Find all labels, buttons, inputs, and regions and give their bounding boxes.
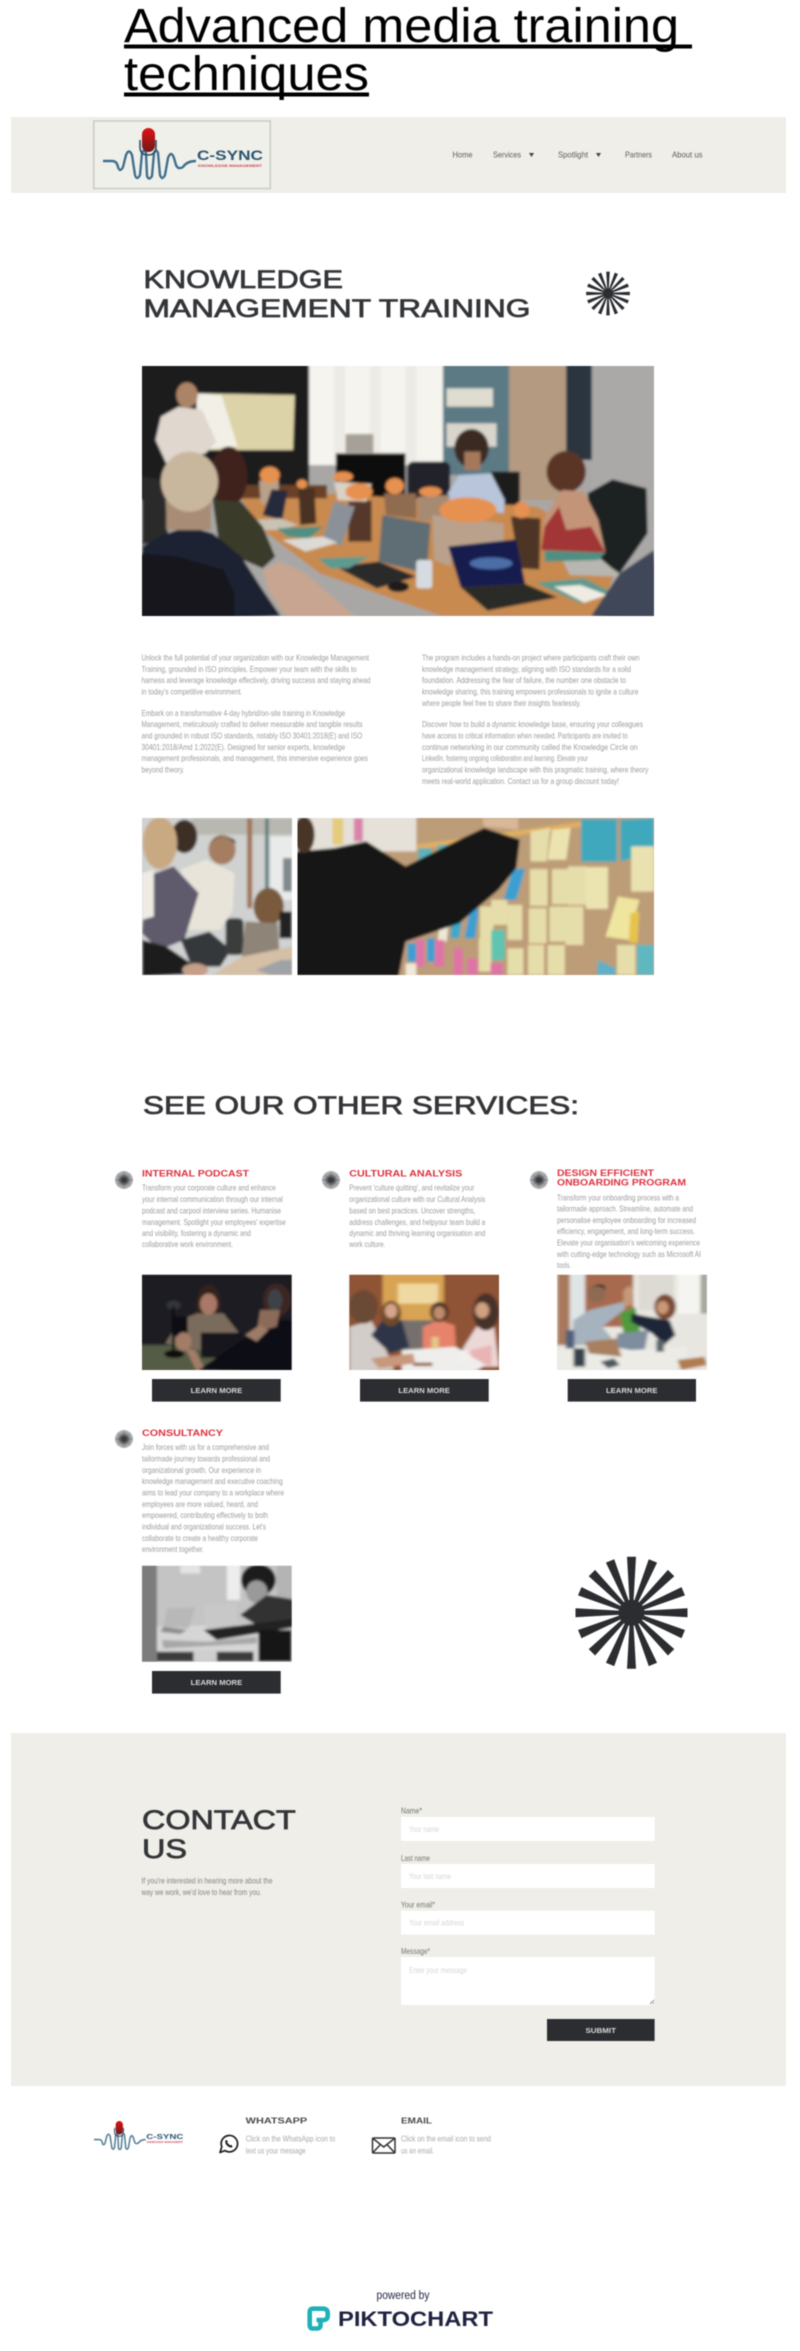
button: submit: SUBMIT	[586, 2026, 616, 2035]
navigation menu: Partners	[625, 150, 652, 160]
panel: body text left column: and grounded in robust ISO standards, notably ISO 30401:2018(E) and ISO	[142, 730, 363, 740]
button: learn more	[360, 1379, 489, 1402]
panel: body text left column: harness and leverage knowledge effectively, driving success and staying ahead	[142, 675, 371, 685]
email title: EMAIL	[401, 2116, 432, 2126]
panel: body text right column: foundation. Addressing the fear of failure, the number one obstacle to	[422, 675, 626, 685]
powered by piktochart: PIKTOCHART	[338, 2308, 493, 2331]
form: message field	[401, 1946, 655, 2005]
panel: whatsapp contact	[220, 2116, 336, 2156]
service title: INTERNAL PODCAST	[142, 1168, 249, 1179]
service description: organizational culture with our Cultural Analysis	[349, 1194, 485, 1204]
service description: collaborative work environment.	[142, 1239, 233, 1249]
service description: aims to lead your company to a workplace where	[142, 1488, 284, 1498]
button: learn more: LEARN MORE	[398, 1386, 450, 1395]
navigation menu: Spotlight	[558, 150, 589, 160]
service title: DESIGN EFFICIENT	[557, 1167, 654, 1178]
button: submit	[547, 2019, 655, 2041]
panel: internal podcast	[115, 1168, 300, 1402]
panel: body text right column: meets real-world application. Contact us for a group discount today!	[422, 776, 619, 786]
form: last name field: Last name	[401, 1853, 430, 1863]
panel: body text right column: where people feel free to share their insights fearlessly.	[421, 698, 581, 708]
logo: C-SYNC footer: C-SYNC	[146, 2132, 184, 2141]
powered by piktochart: powered by	[376, 2290, 430, 2302]
panel: body text left column: in today's competitive environment.	[142, 686, 242, 696]
navigation menu: About us	[672, 150, 702, 160]
panel: body text left column: Embark on a transformative 4-day hybrid/on-site training in Knowledge	[142, 708, 345, 718]
panel: body text left column: Management, meticulously crafted to deliver measurable and tangible results	[142, 719, 362, 729]
logo: C-SYNC footer	[93, 2120, 184, 2151]
logo: C-SYNC header: C-SYNC	[197, 148, 263, 163]
form: email field: Your email address	[409, 1918, 464, 1928]
icon: envelope	[372, 2138, 395, 2153]
service title: CONSULTANCY	[142, 1427, 224, 1438]
photo: monochrome laptops	[141, 1565, 292, 1662]
service description: knowledge management and executive coaching	[142, 1476, 283, 1486]
logo: C-SYNC footer: KNOWLEDGE MANAGEMENT	[147, 2141, 184, 2144]
service description: podcast and carpool interview series. Humanise	[142, 1206, 281, 1216]
service description	[349, 1182, 486, 1249]
form: email field: Your email*	[401, 1900, 436, 1910]
form: name field: Name*	[401, 1806, 423, 1816]
icon: starburst	[530, 1171, 548, 1189]
panel: consultancy	[115, 1427, 300, 1694]
panel: body text right column: The program includes a hands-on project where participants craft their own	[422, 652, 640, 662]
service description: environment together.	[142, 1544, 204, 1554]
button: learn more	[152, 1379, 281, 1402]
whatsapp text: Click on the WhatsApp icon to	[246, 2134, 336, 2144]
button: learn more: LEARN MORE	[191, 1678, 242, 1687]
service description: management. Spotlight your employees' expertise	[142, 1217, 286, 1227]
panel: body text right column: have access to critical information when needed. Participants are invited to	[422, 730, 628, 740]
panel: body text left column: beyond theory.	[142, 764, 184, 774]
service description: Join forces with us for a comprehensive and	[142, 1442, 269, 1452]
photo: team around a table	[141, 817, 293, 976]
panel: cultural analysis	[322, 1168, 509, 1402]
heading: contact us	[142, 1805, 296, 1864]
panel: body text left column	[142, 652, 371, 774]
service title: ONBOARDING PROGRAM	[557, 1177, 686, 1188]
contact intro text: If you're interested in hearing more about the	[142, 1876, 273, 1886]
powered by piktochart	[310, 2290, 493, 2331]
email text: us an email.	[401, 2146, 434, 2156]
form: name field: Your name	[409, 1824, 439, 1834]
service description: Prevent 'culture quitting', and revitalize your	[349, 1182, 474, 1192]
panel: design efficient onboarding program	[530, 1167, 716, 1402]
photo: sticky notes wall	[296, 817, 655, 976]
title: Advanced media training	[124, 0, 679, 53]
service description: tailormade approach. Streamline, automate and	[557, 1204, 693, 1214]
photo: colleagues high five	[556, 1274, 708, 1370]
title: techniques	[124, 48, 369, 101]
photo: meeting room training	[141, 365, 655, 617]
photo: podcast recording	[141, 1274, 292, 1371]
contact intro text	[141, 1876, 273, 1897]
service description: Transform your onboarding process with a	[557, 1192, 679, 1202]
panel: body text right column: continue networking in our community called the Knowledge Circle on	[422, 742, 638, 752]
service description: employees are more valued, heard, and	[142, 1499, 258, 1509]
panel: body text left column: Unlock the full potential of your organization with our Knowledge Management	[142, 652, 370, 662]
navigation menu: Services	[493, 150, 521, 160]
form: last name field	[401, 1853, 655, 1888]
service description: dynamic and thriving learning organisation and	[349, 1228, 486, 1238]
service title	[557, 1167, 686, 1188]
panel: body text left column: management professionals, and management, this immersive experience goes	[142, 753, 368, 763]
service description	[142, 1442, 284, 1554]
service description: personalise employee onboarding for increased	[557, 1215, 696, 1225]
heading: see our other services: SEE OUR OTHER SERVICES:	[143, 1092, 579, 1120]
form: message field: Enter your message	[409, 1965, 467, 1975]
service description: work culture.	[349, 1239, 385, 1249]
heading: contact us: CONTACT	[142, 1805, 296, 1835]
heading: knowledge management training	[144, 266, 530, 323]
icon: large starburst	[576, 1557, 688, 1669]
icon: starburst	[322, 1171, 340, 1189]
button: learn more	[568, 1379, 696, 1402]
navigation menu	[452, 150, 702, 160]
heading: knowledge management training: KNOWLEDGE	[144, 266, 343, 294]
service description	[556, 1192, 701, 1270]
logo: C-SYNC header	[94, 121, 270, 188]
email text	[401, 2134, 491, 2156]
navigation menu: Home	[452, 150, 473, 160]
service description: with cutting-edge technology such as Microsoft AI	[556, 1249, 701, 1259]
whatsapp text: text us your message	[246, 2146, 306, 2156]
panel: navigation header	[11, 117, 786, 193]
service description: individual and organizational success. Let's	[142, 1522, 266, 1532]
service description: based on best practices. Uncover strengths,	[349, 1206, 475, 1216]
photo: women talking in cafe	[348, 1274, 500, 1371]
heading: knowledge management training: MANAGEMENT TRAINING	[144, 295, 530, 323]
panel: email contact	[372, 2116, 491, 2156]
service description: empowered, contributing effectively to both	[142, 1510, 268, 1520]
service description: and visibility, fostering a dynamic and	[142, 1228, 251, 1238]
logo: C-SYNC header: KNOWLEDGE MANAGEMENT	[198, 163, 263, 168]
panel: body text right column: LinkedIn, fostering ongoing collaboration and learning. Elevate your	[422, 753, 588, 763]
icon: piktochart logo	[310, 2309, 328, 2328]
service description: organizational growth. Our experience in	[142, 1465, 261, 1475]
service description: tools.	[557, 1260, 571, 1270]
email text: Click on the email icon to send	[401, 2134, 491, 2144]
panel: body text right column	[421, 652, 649, 786]
whatsapp title: WHATSAPP	[246, 2116, 308, 2126]
service title: CULTURAL ANALYSIS	[349, 1168, 462, 1179]
panel: body text right column: Discover how to build a dynamic knowledge base, ensuring your colleagues	[422, 719, 643, 729]
service description: collaborate to create a healthy corporate	[142, 1533, 258, 1543]
panel: body text left column: 30401:2018/Amd 1:2022(E). Designed for senior experts, knowledge	[142, 742, 345, 752]
panel: body text right column: knowledge sharing, this training empowers professionals to ignite a culture	[422, 686, 639, 696]
service description: address challenges, and helpyour team build a	[349, 1217, 486, 1227]
form: name field	[401, 1806, 655, 1841]
title	[124, 0, 692, 101]
form: email field	[401, 1900, 655, 1935]
icon: starburst top	[586, 272, 630, 315]
form: message field: Message*	[401, 1946, 431, 1956]
button: learn more: LEARN MORE	[191, 1386, 242, 1395]
whatsapp text	[246, 2134, 336, 2156]
contact intro text: way we work, we'd love to hear from you.	[141, 1887, 262, 1897]
service description: efficiency, engagement, and long-term success.	[557, 1226, 695, 1236]
panel: body text right column: organizational knowledge landscape with this pragmatic training, where theory	[422, 764, 649, 774]
service description: your internal communication through our internal	[142, 1194, 283, 1204]
icon: whatsapp	[220, 2135, 238, 2152]
button: learn more	[152, 1671, 281, 1694]
panel: contact section	[11, 1733, 786, 2086]
service description: Transform your corporate culture and enhance	[142, 1182, 276, 1192]
icon: starburst	[115, 1171, 133, 1189]
service description	[142, 1182, 286, 1249]
service description: tailormade journey towards professional and	[142, 1454, 270, 1464]
icon: starburst	[115, 1430, 133, 1448]
form: last name field: Your last name	[409, 1871, 451, 1881]
panel: body text left column: Training, grounded in ISO principles. Empower your team with the skills to	[142, 664, 357, 674]
button: learn more: LEARN MORE	[606, 1386, 658, 1395]
panel: body text right column: knowledge management strategy, aligning with ISO standards for a solid	[422, 664, 631, 674]
service description: Elevate your organisation's welcoming experience	[557, 1238, 700, 1248]
heading: contact us: US	[142, 1834, 187, 1864]
